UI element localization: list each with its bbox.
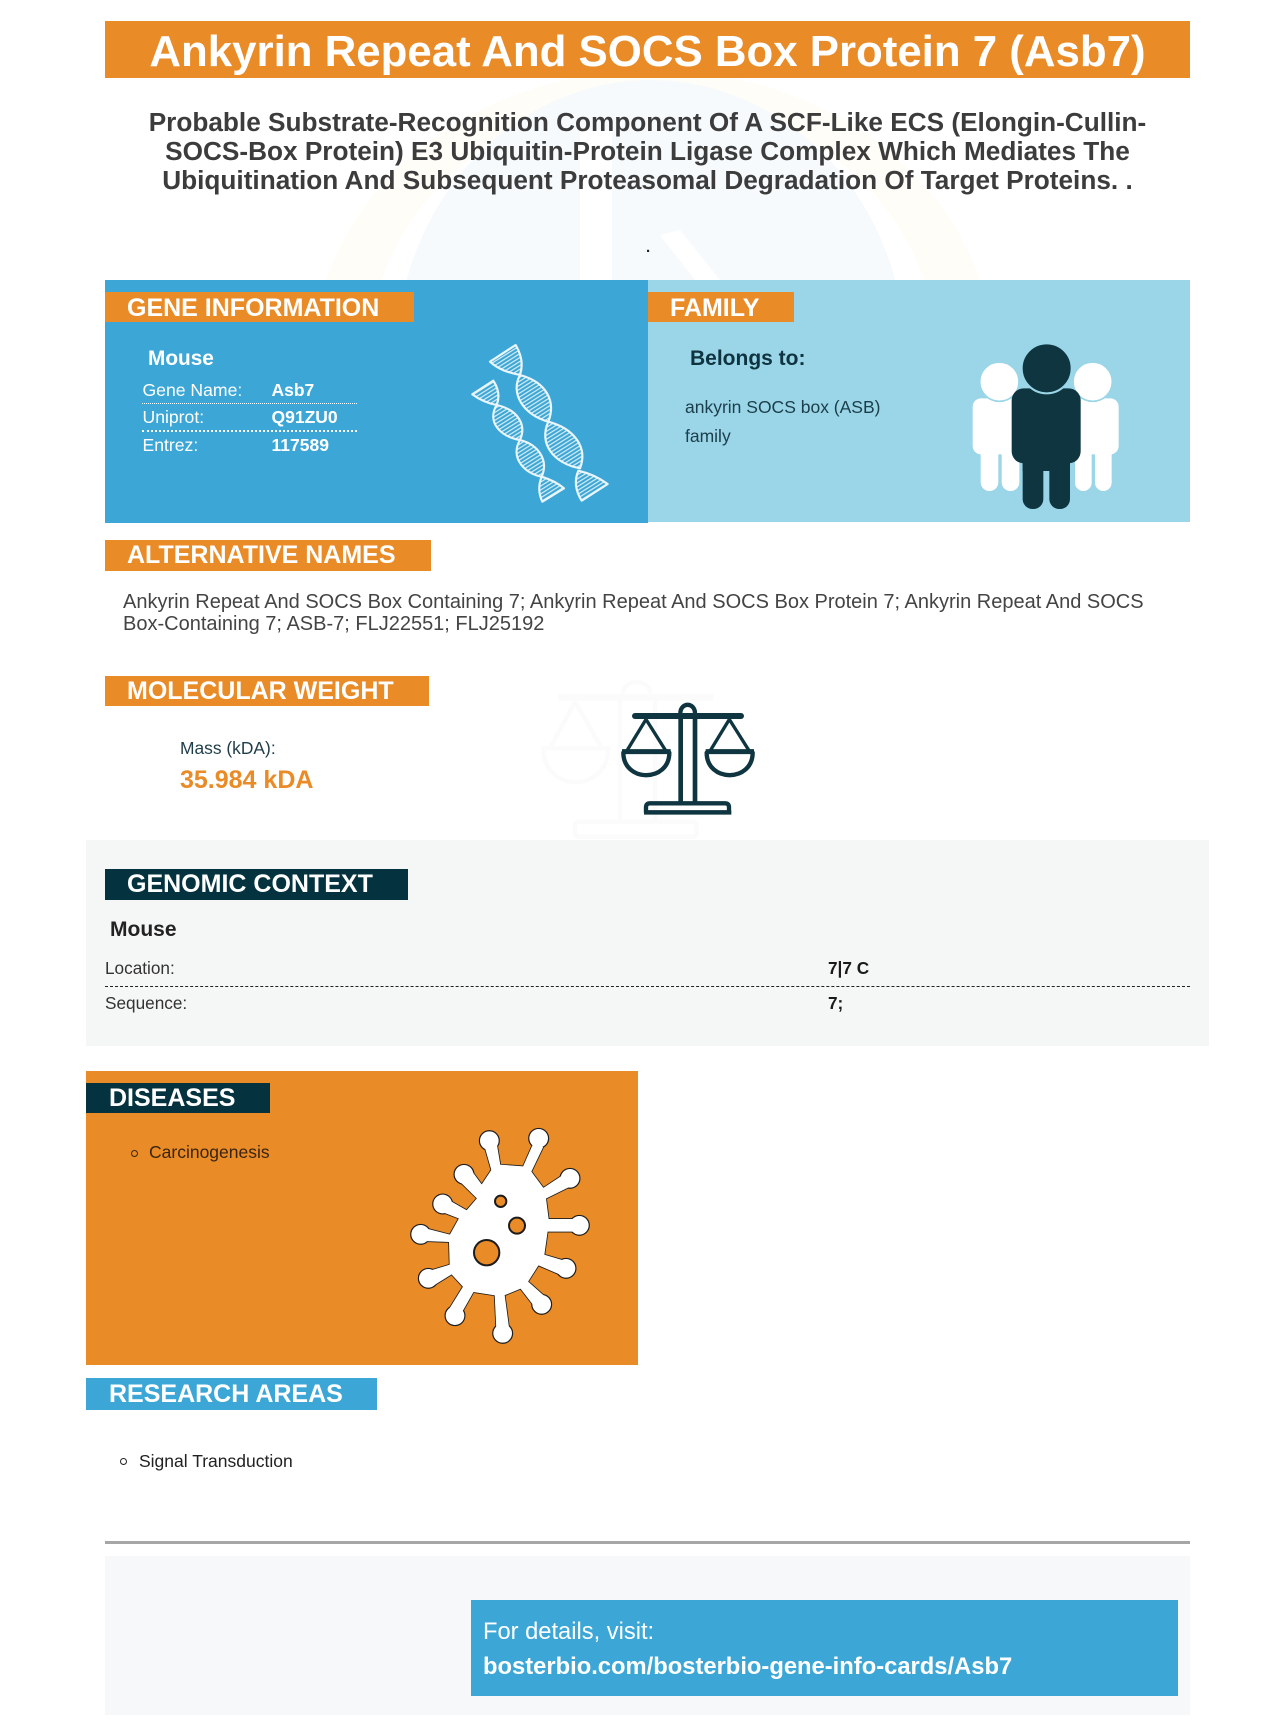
genomic organism: Mouse xyxy=(110,918,177,941)
subtitle description xyxy=(149,107,1146,195)
heading: family: FAMILY xyxy=(670,294,759,322)
heading: genomic context: GENOMIC CONTEXT xyxy=(127,870,373,898)
row: uniprot xyxy=(142,404,357,432)
family name: family xyxy=(685,426,731,446)
heading: research areas: RESEARCH AREAS xyxy=(109,1380,343,1408)
row: uniprot: Uniprot: xyxy=(142,407,204,427)
heading: family xyxy=(648,292,794,322)
row: uniprot: Q91ZU0 xyxy=(272,407,338,427)
family name: ankyrin SOCS box (ASB) xyxy=(685,397,880,417)
research bullet xyxy=(120,1458,127,1465)
panel: footer xyxy=(105,1556,1190,1715)
callout: details link xyxy=(471,1600,1178,1696)
row: location: 7|7 C xyxy=(828,958,869,978)
subtitle description: Ubiquitination And Subsequent Proteasomal Degradation Of Target Proteins. . xyxy=(162,165,1133,195)
panel: gene information xyxy=(105,280,648,523)
row: gene name xyxy=(142,376,357,404)
callout label: For details, visit: xyxy=(483,1619,654,1645)
subtitle description: SOCS-Box Protein) E3 Ubiquitin-Protein Ligase Complex Which Mediates The xyxy=(165,136,1130,166)
panel: family xyxy=(648,280,1190,522)
row: location xyxy=(105,953,1190,987)
small dot text: . xyxy=(646,239,650,256)
heading: diseases: DISEASES xyxy=(109,1084,235,1112)
watermark logo xyxy=(407,80,895,280)
row: gene name: Asb7 xyxy=(272,380,314,400)
row: gene name: Gene Name: xyxy=(142,380,242,400)
mass value: 35.984 kDA xyxy=(180,766,313,794)
family name xyxy=(685,397,880,446)
heading: diseases xyxy=(86,1083,270,1113)
disease item: Carcinogenesis xyxy=(149,1142,270,1162)
alternative names text: Ankyrin Repeat And SOCS Box Containing 7; Ankyrin Repeat And SOCS Box Protein 7; Ankyrin Repeat And SOCS xyxy=(123,591,1144,613)
gene organism: Mouse xyxy=(148,347,214,370)
research item: Signal Transduction xyxy=(139,1451,293,1471)
alternative names text: Box-Containing 7; ASB-7; FLJ22551; FLJ25192 xyxy=(123,613,544,635)
title banner: Ankyrin Repeat And SOCS Box Protein 7 (Asb7) xyxy=(149,27,1146,76)
icon: virus xyxy=(410,1128,590,1344)
mass label: Mass (kDA): xyxy=(180,738,276,758)
row: location: Location: xyxy=(105,958,175,978)
panel: diseases xyxy=(86,1071,638,1365)
belongs to label: Belongs to: xyxy=(690,347,806,370)
heading: molecular weight: MOLECULAR WEIGHT xyxy=(127,677,394,705)
row: entrez: Entrez: xyxy=(142,435,198,455)
row: entrez xyxy=(142,435,329,455)
callout url: bosterbio.com/bosterbio-gene-info-cards/Asb7 xyxy=(483,1653,1012,1680)
gene table xyxy=(142,380,357,455)
subtitle description: Probable Substrate-Recognition Component Of A SCF-Like ECS (Elongin-Cullin- xyxy=(149,107,1146,137)
row: entrez: 117589 xyxy=(272,435,329,455)
row: sequence: Sequence: xyxy=(105,993,187,1013)
disease bullet xyxy=(131,1150,138,1157)
icon: ghost scale xyxy=(540,680,770,845)
row: sequence xyxy=(105,993,843,1013)
icon: family people xyxy=(972,344,1119,509)
heading: alternative names: ALTERNATIVE NAMES xyxy=(127,541,396,569)
panel: genomic context xyxy=(86,840,1209,1046)
icon: dna helices xyxy=(471,344,609,503)
row: sequence: 7; xyxy=(828,993,843,1013)
alternative names text xyxy=(123,591,1144,635)
divider line xyxy=(105,1541,1190,1544)
heading: gene information: GENE INFORMATION xyxy=(127,294,379,322)
icon: balance scale xyxy=(621,702,755,815)
